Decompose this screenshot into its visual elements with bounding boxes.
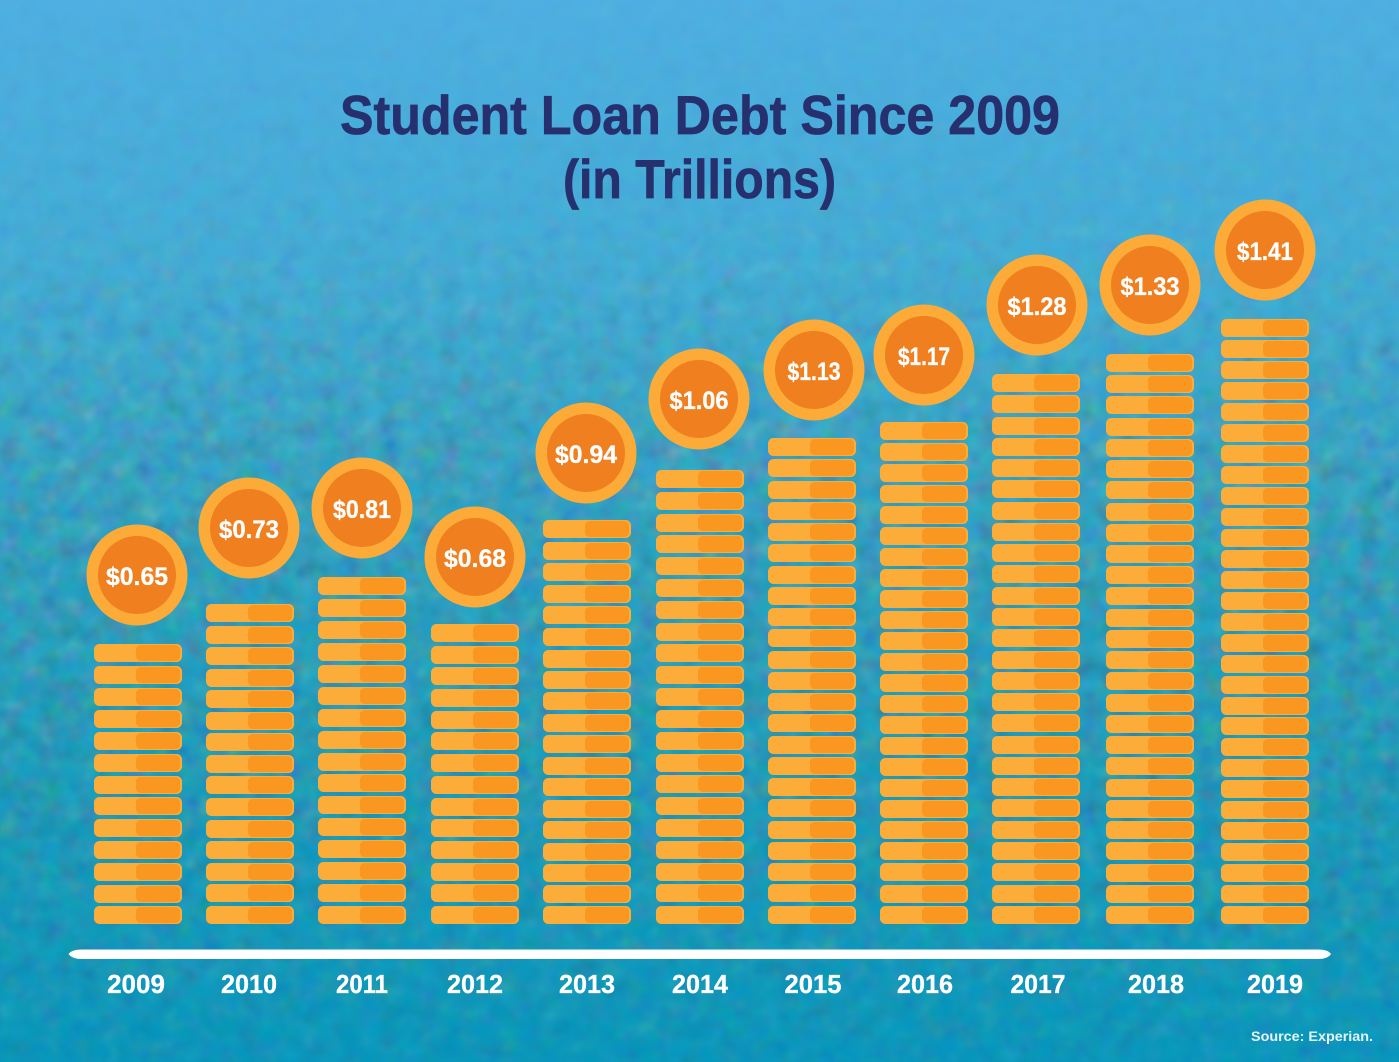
coin stack: 2009 — [94, 644, 182, 924]
year label: 2012: 2012 — [447, 969, 503, 999]
column: 2013 — [536, 402, 636, 999]
chart baseline — [68, 950, 1331, 959]
column: 2014 — [648, 348, 750, 999]
coin stack: 2016 — [880, 422, 968, 924]
column: 2012 — [424, 506, 526, 999]
value badge: $1.17: $1.17 — [898, 343, 950, 371]
coin stack: 2010 — [206, 604, 294, 924]
column: 2011 — [312, 458, 412, 999]
coin stack: 2014 — [656, 470, 744, 924]
year label: 2014: 2014 — [672, 969, 729, 999]
coin stack: 2018 — [1106, 354, 1194, 924]
year label: 2010: 2010 — [221, 969, 277, 999]
value badge: $0.73 — [198, 478, 300, 578]
year label: 2015: 2015 — [784, 969, 842, 999]
column: 2017 — [986, 254, 1088, 999]
value badge: $1.41: $1.41 — [1237, 238, 1293, 266]
value badge: $0.94 — [536, 402, 636, 504]
value badge: $0.81 — [312, 458, 412, 558]
coin stack: 2015 — [768, 438, 856, 924]
value badge: $1.13: $1.13 — [788, 358, 840, 386]
value badge: $1.06 — [648, 348, 750, 450]
year label: 2017: 2017 — [1010, 969, 1066, 999]
column: 2015 — [764, 320, 864, 999]
value badge: $0.94: $0.94 — [555, 441, 617, 469]
year label: 2011: 2011 — [336, 969, 388, 999]
title: Student Loan Debt Since 2009 — [340, 84, 1060, 146]
value badge: $1.28: $1.28 — [1008, 293, 1067, 321]
value badge: $0.73: $0.73 — [219, 516, 279, 544]
column: 2016 — [874, 304, 974, 999]
value badge: $0.68 — [424, 506, 526, 608]
value badge: $1.28 — [986, 254, 1088, 356]
coin stack: 2011 — [318, 577, 406, 924]
column: 2019 — [1214, 200, 1316, 999]
value badge: $0.68: $0.68 — [444, 545, 506, 573]
year label: 2013: 2013 — [559, 969, 615, 999]
coin stack: 2019 — [1221, 319, 1309, 924]
value badge: $0.65: $0.65 — [106, 563, 168, 591]
title — [340, 84, 1060, 210]
column: 2018 — [1100, 234, 1200, 999]
value badge: $1.33 — [1100, 234, 1200, 336]
source note: Source: Experian. — [1251, 1028, 1373, 1044]
coin stack: 2017 — [992, 374, 1080, 924]
value badge: $1.17 — [874, 304, 974, 406]
year label: 2019: 2019 — [1247, 969, 1303, 999]
year label: 2018: 2018 — [1128, 969, 1184, 999]
title: (in Trillions) — [563, 148, 836, 210]
coin stack: 2013 — [543, 520, 631, 924]
year label: 2016: 2016 — [897, 969, 953, 999]
value badge: $1.06: $1.06 — [670, 387, 728, 415]
value badge: $1.33: $1.33 — [1120, 273, 1180, 301]
value badge: $0.81: $0.81 — [333, 496, 391, 524]
value badge: $0.65 — [86, 524, 188, 626]
coin stack: 2012 — [431, 624, 519, 924]
column: 2010 — [198, 478, 300, 999]
value badge: $1.41 — [1214, 200, 1316, 300]
year label: 2009: 2009 — [107, 969, 165, 999]
value badge: $1.13 — [764, 320, 864, 420]
bar chart: student loan debt by year — [68, 200, 1331, 999]
column: 2009 — [86, 524, 188, 999]
